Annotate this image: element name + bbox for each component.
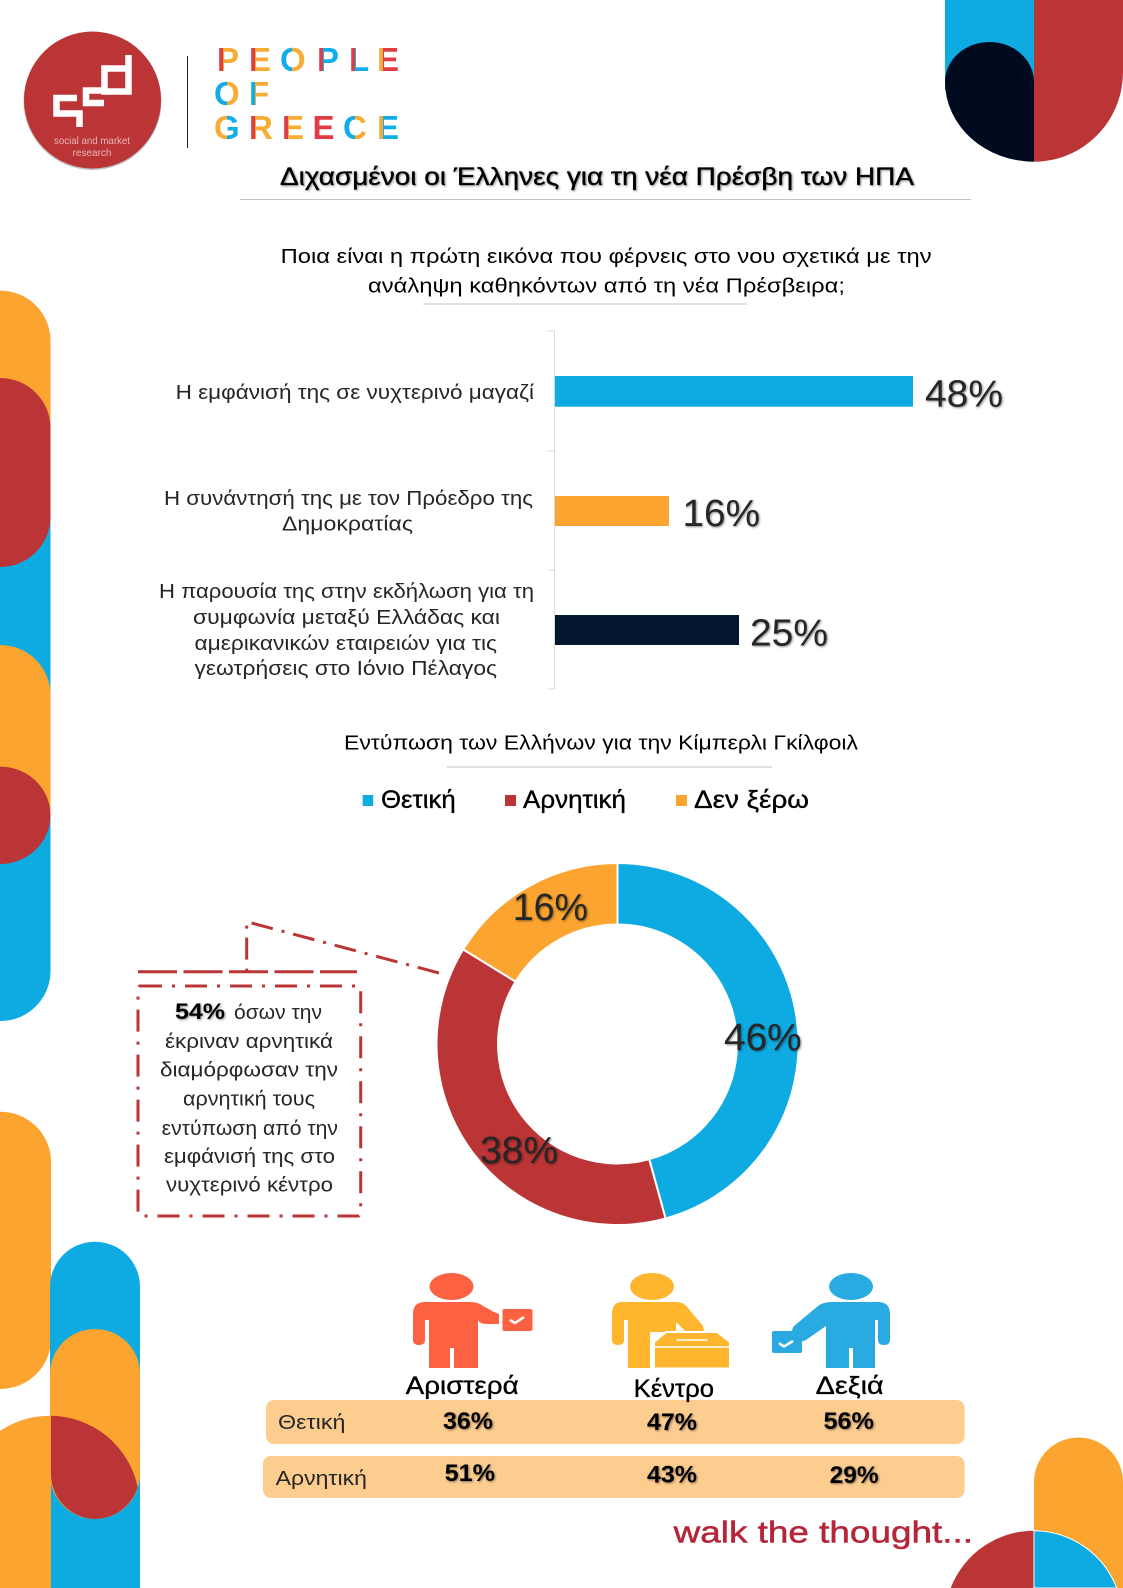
bar row: meeting with the President 16% — [164, 488, 760, 536]
callout text: 54% — [175, 999, 225, 1024]
bar row: drilling agreement event 25%: Η παρουσία της στην εκδήλωση για τη — [159, 581, 534, 603]
table column headings: Αριστερά — [406, 1372, 519, 1400]
logo: social and market research — [24, 32, 162, 170]
callout pointer — [247, 922, 439, 973]
logo: People of Greece: GREECE — [214, 109, 399, 146]
table row: negative: Αρνητική — [276, 1468, 367, 1490]
callout text: εντύπωση από την — [162, 1118, 338, 1140]
table row: positive — [278, 1408, 874, 1436]
logo divider — [186, 56, 188, 148]
donut chart — [437, 863, 802, 1225]
table column headings — [406, 1372, 884, 1403]
icon: voter right — [772, 1273, 890, 1368]
legend: Δεν ξέρω — [694, 786, 809, 814]
table row: positive: 47% — [647, 1409, 697, 1436]
bar row: drilling agreement event 25% — [159, 581, 828, 680]
logo: People of Greece: PEOPLE — [217, 41, 399, 78]
decorative shapes: bottom left — [0, 1112, 140, 1588]
legend: Θετική — [381, 786, 456, 814]
question heading: ανάληψη καθηκόντων από τη νέα Πρέσβειρα; — [368, 276, 845, 298]
decorative shapes: top right — [945, 0, 1123, 162]
question heading: Ποια είναι η πρώτη εικόνα που φέρνεις στο νου σχετικά με την — [281, 246, 932, 268]
bar row: drilling agreement event 25%: αμερικανικών εταιρειών για τις — [194, 633, 497, 655]
table rows background — [263, 1400, 965, 1498]
table row: positive: 56% — [824, 1408, 874, 1435]
logo: People of Greece — [214, 41, 399, 146]
decorative shapes: bottom right — [951, 1438, 1123, 1588]
bar row: meeting with the President 16%: Η συνάντησή της με τον Πρόεδρο της — [164, 488, 533, 510]
callout text — [160, 999, 338, 1197]
logo: social and market research: research — [72, 147, 112, 159]
decorative shapes: left strip — [0, 291, 50, 1021]
question heading — [281, 246, 932, 298]
bar row: night club appearance 48%: 48% — [925, 374, 1003, 416]
table row: positive: Θετική — [278, 1412, 345, 1434]
legend: Αρνητική — [523, 786, 626, 814]
callout text: όσων την — [234, 1002, 322, 1024]
title: Διχασμένοι οι Έλληνες για τη νέα Πρέσβη των ΗΠΑ — [280, 163, 914, 191]
table row: negative: 43% — [647, 1462, 697, 1489]
bar row: drilling agreement event 25%: 25% — [750, 613, 828, 655]
callout text: νυχτερινό κέντρο — [166, 1175, 333, 1197]
table row: negative: 29% — [830, 1462, 879, 1489]
callout text: εμφάνισή της στο — [164, 1146, 335, 1168]
logo: social and market research: social and market — [54, 135, 130, 147]
bar row: drilling agreement event 25%: συμφωνία μεταξύ Ελλάδας και — [193, 607, 500, 629]
slogan: walk the thought... — [672, 1515, 973, 1550]
callout text: αρνητική τους — [183, 1089, 315, 1111]
donut chart: 46% — [724, 1017, 802, 1059]
donut chart: 38% — [480, 1130, 558, 1172]
table column headings: Δεξιά — [816, 1372, 884, 1400]
bar chart: first image — [159, 331, 1003, 689]
callout — [138, 922, 439, 1216]
bar row: night club appearance 48% — [176, 374, 1003, 416]
table row: negative: 51% — [445, 1460, 495, 1487]
table row: positive: 36% — [443, 1408, 493, 1435]
bar row: meeting with the President 16%: Δημοκρατίας — [282, 514, 413, 536]
section heading: impression: Εντύπωση των Ελλήνων για την Κίμπερλι Γκίλφοιλ — [344, 732, 858, 754]
legend — [363, 786, 809, 814]
bar row: drilling agreement event 25%: γεωτρήσεις στο Ιόνιο Πέλαγος — [194, 658, 497, 680]
icon: voter centre — [612, 1273, 730, 1368]
bar row: meeting with the President 16%: 16% — [682, 493, 760, 535]
icon: voter left — [413, 1273, 532, 1368]
donut chart: 16% — [513, 887, 588, 929]
table row: negative — [276, 1460, 879, 1490]
bar row: night club appearance 48%: Η εμφάνισή της σε νυχτερινό μαγαζί — [176, 382, 535, 404]
callout text: έκριναν αρνητικά — [165, 1031, 333, 1053]
callout text: διαμόρφωσαν την — [160, 1060, 338, 1082]
table column headings: Κέντρο — [634, 1375, 714, 1403]
logo: People of Greece: OF — [214, 75, 269, 112]
